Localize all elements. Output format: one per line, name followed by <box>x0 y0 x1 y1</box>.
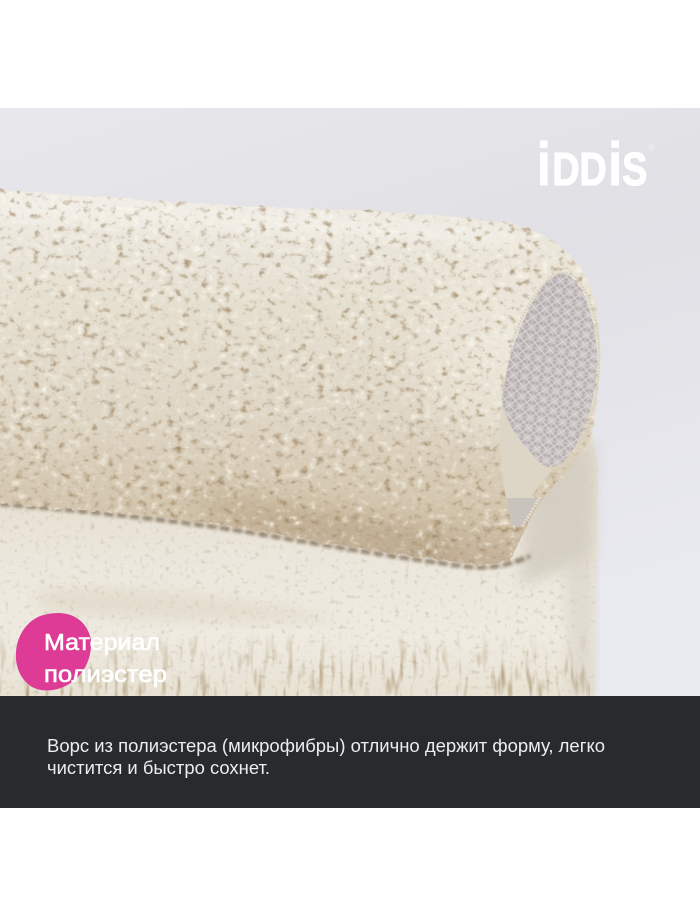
product photo: rolled bath mat <box>0 108 700 696</box>
pink blob <box>16 613 91 690</box>
photo backdrop <box>0 108 700 696</box>
roll inner opening with mesh backing <box>502 273 599 469</box>
caption bar <box>0 696 700 808</box>
caption text: чистится и быстро сохнет. <box>47 758 270 778</box>
folded flap under opening <box>500 405 552 530</box>
logo: IDDIS: iDDiS <box>537 130 647 198</box>
registered mark: ® <box>648 143 655 153</box>
infographic canvas <box>0 108 700 808</box>
badge: material <box>16 613 167 690</box>
roll lower warm shadow <box>200 490 470 555</box>
flap stitched edge <box>522 497 540 527</box>
mat right edge shade <box>565 560 594 696</box>
roll end highlight <box>437 300 532 432</box>
lower flat mat <box>0 420 598 696</box>
shadow under roll <box>0 504 530 568</box>
stitched rim <box>513 273 599 469</box>
badge label: полиэстер <box>44 661 167 687</box>
mat shaded fold <box>42 590 304 622</box>
mat fringe <box>0 630 590 696</box>
roll top highlight <box>362 228 511 244</box>
rolled mat body <box>0 170 620 565</box>
flap backing triangle <box>506 498 540 527</box>
mat shade beside flap <box>520 440 594 585</box>
badge label: Материал <box>44 629 160 655</box>
caption text: Ворс из полиэстера (микрофибры) отлично держит форму, легко <box>47 736 605 756</box>
